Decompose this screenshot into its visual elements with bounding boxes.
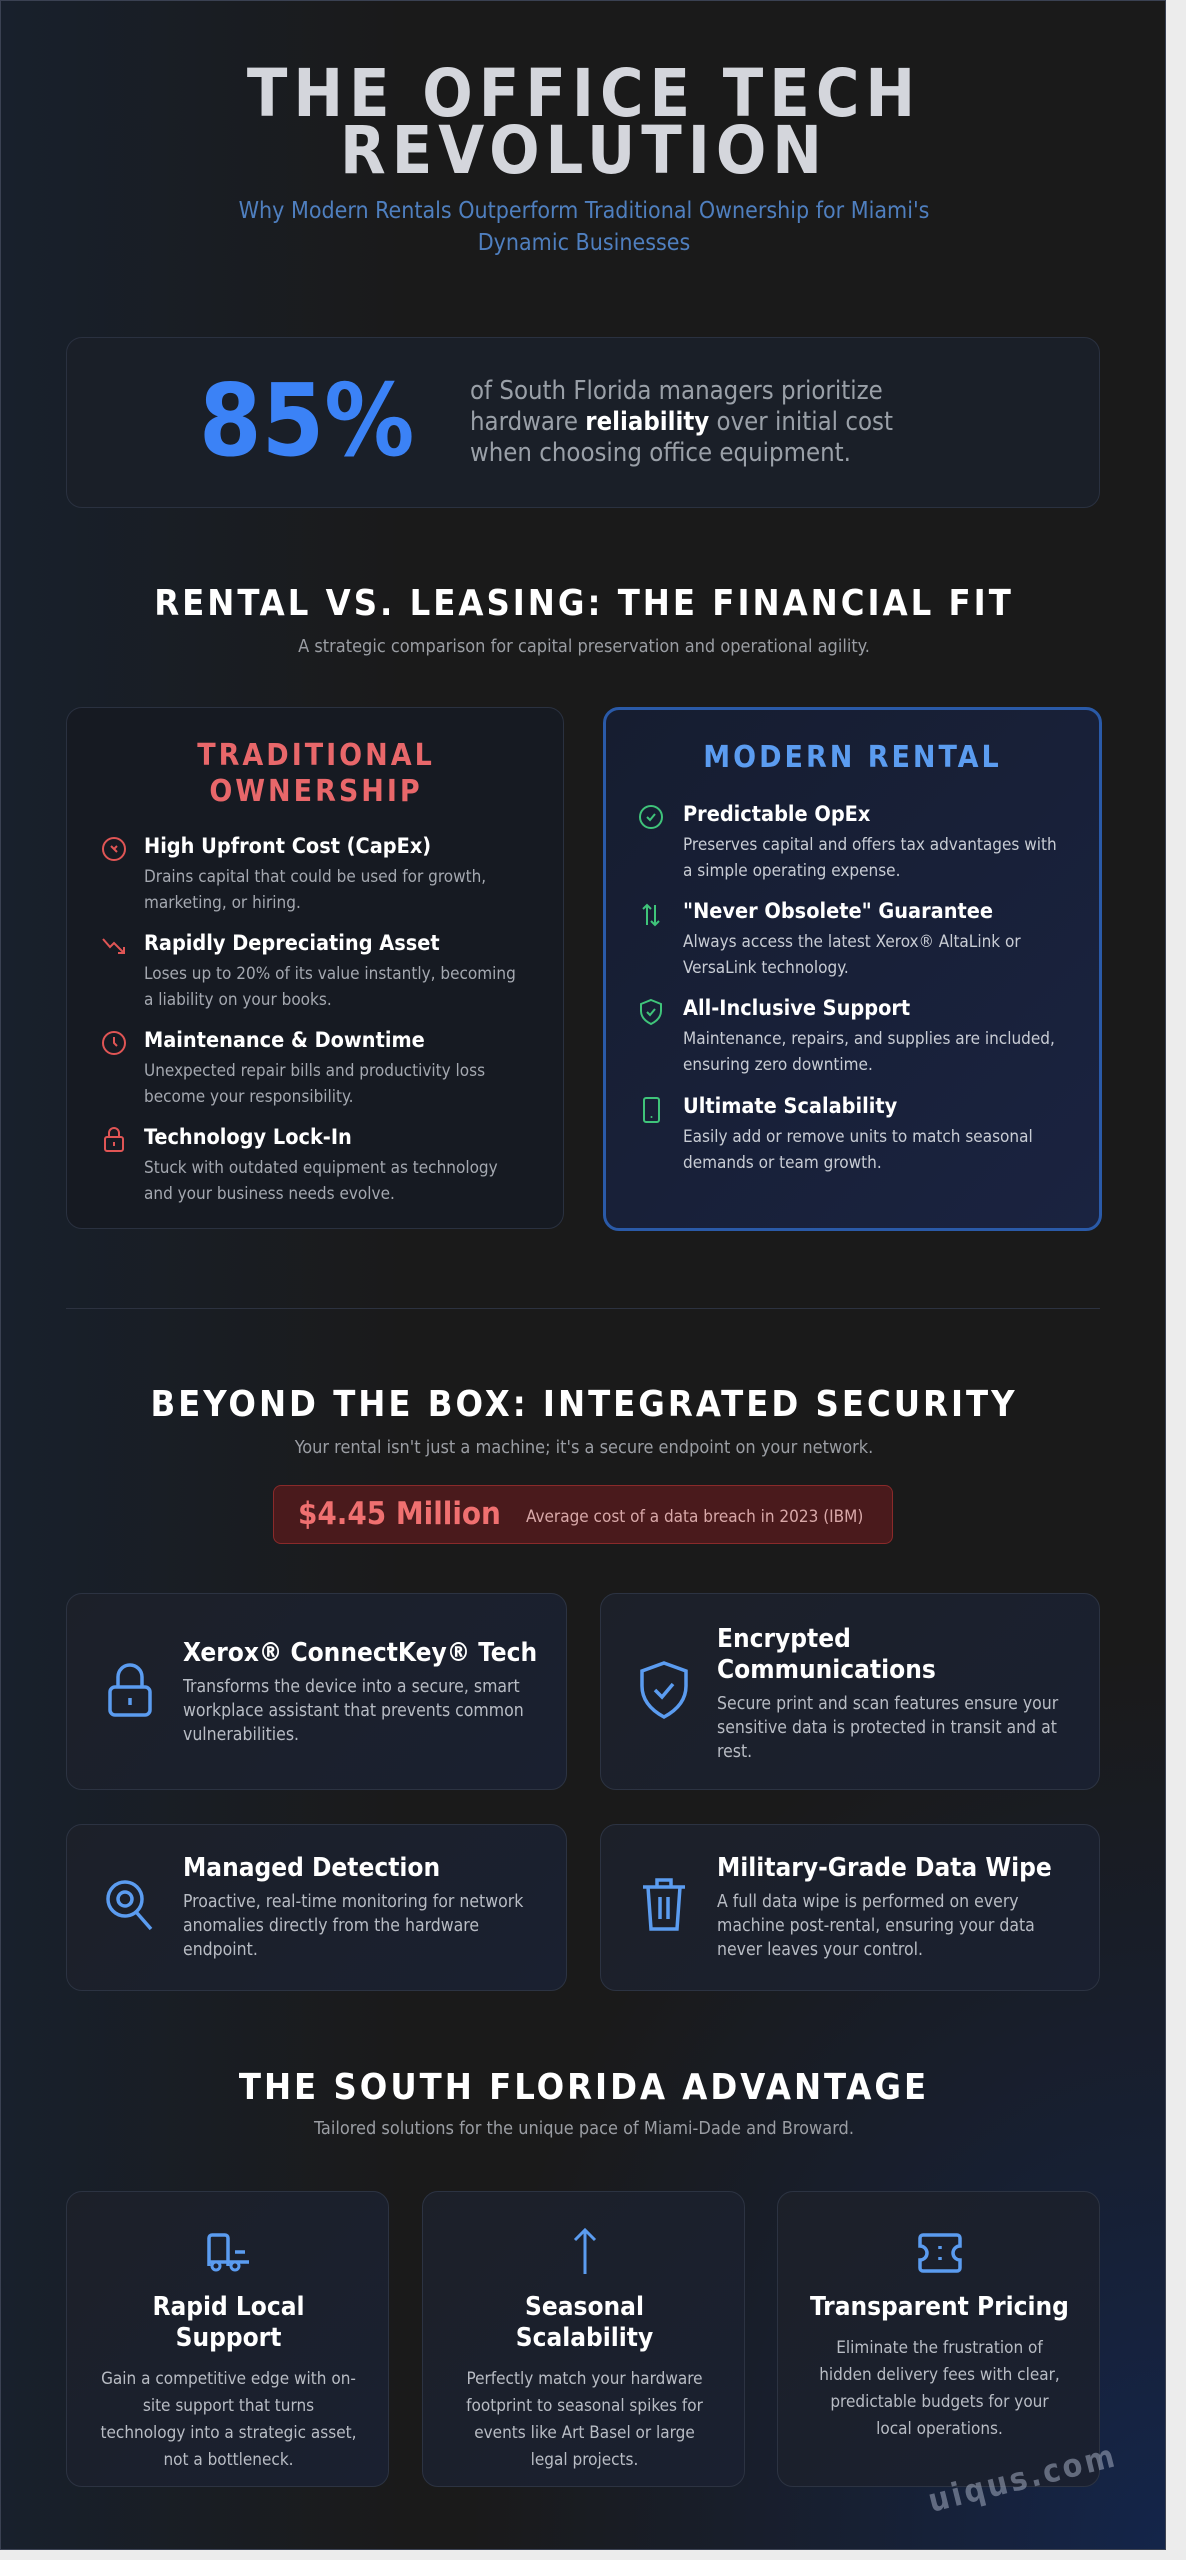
item: upfront cost [102, 834, 486, 913]
stat text: of South Florida managers prioritize hardware reliability over initial cost when choosing office equipment. [470, 376, 893, 468]
item: depreciating: Rapidly Depreciating Asset [144, 931, 440, 956]
card: data wipe: Military-Grade Data Wipe [717, 1853, 1052, 1883]
card: transparent pricing: Transparent Pricing [810, 2292, 1069, 2322]
card: data wipe [600, 1824, 1100, 1991]
icon: magnifier [106, 1880, 152, 1930]
callout: breach cost [273, 1485, 893, 1544]
card: seasonal scalability [422, 2191, 745, 2487]
card: connectkey [66, 1593, 567, 1790]
panel: modern rental [603, 707, 1102, 1231]
card: encrypted: Communications [717, 1655, 936, 1685]
item: upfront cost: Drains capital that could be used for growth, marketing, or hiring. [144, 867, 486, 913]
heading: security: BEYOND THE BOX: INTEGRATED SECURITY [150, 1384, 1018, 1425]
icon: truck [207, 2233, 249, 2272]
title [247, 55, 921, 189]
heading: rental vs leasing: RENTAL VS. LEASING: THE FINANCIAL FIT [154, 583, 1014, 624]
stat number: 85% [199, 362, 414, 479]
callout: breach cost: Average cost of a data breach in 2023 (IBM) [526, 1507, 863, 1527]
watermark: uiqus.com [924, 2436, 1121, 2520]
card: encrypted [600, 1593, 1100, 1790]
subheading: Tailored solutions for the unique pace of Miami-Dade and Broward. [314, 2118, 854, 2139]
panel: traditional ownership [66, 707, 564, 1229]
item: depreciating: Loses up to 20% of its value instantly, becoming a liability on your books. [144, 964, 516, 1010]
icon: ticket [918, 2233, 962, 2273]
card: seasonal scalability: Seasonal [525, 2292, 644, 2322]
card: encrypted: Secure print and scan features ensure your sensitive data is protected in transit and at rest. [717, 1694, 1058, 1762]
card: detection: Managed Detection [183, 1853, 440, 1883]
card: rapid local support: Gain a competitive edge with on-site support that turns technology into a strategic asset, not a bottleneck. [100, 2369, 356, 2470]
item: never obsolete: "Never Obsolete" Guarantee [683, 899, 993, 924]
card: rapid local support [66, 2191, 389, 2487]
item: opex [639, 802, 1057, 881]
stat panel [66, 337, 1100, 508]
card: detection [66, 1824, 567, 1991]
card: rapid local support: Rapid Local [152, 2292, 305, 2322]
subheading: Your rental isn't just a machine; it's a secure endpoint on your network. [295, 1437, 873, 1458]
item: lock-in: Stuck with outdated equipment as technology and your business needs evolve. [144, 1158, 498, 1204]
card: transparent pricing: Eliminate the frustration of hidden delivery fees with clear, predictable budgets for your local operations. [819, 2338, 1060, 2439]
item: support: Maintenance, repairs, and supplies are included, ensuring zero downtime. [683, 1029, 1055, 1075]
item: depreciating [102, 931, 516, 1010]
title: REVOLUTION [340, 112, 828, 189]
item: maintenance: Maintenance & Downtime [144, 1028, 425, 1053]
item: upfront cost: High Upfront Cost (CapEx) [144, 834, 431, 859]
panel heading: MODERN RENTAL [703, 740, 1002, 775]
item: support: All-Inclusive Support [683, 996, 910, 1021]
item: lock-in: Technology Lock-In [144, 1125, 352, 1150]
item: maintenance: Unexpected repair bills and productivity loss become your responsibility. [144, 1061, 485, 1107]
item: never obsolete [642, 899, 1021, 978]
item: lock-in [104, 1125, 498, 1204]
item: opex: Predictable OpEx [683, 802, 870, 827]
title: THE OFFICE TECH [247, 55, 921, 132]
item: support [640, 996, 1055, 1075]
callout: breach cost: $4.45 Million [298, 1496, 501, 1532]
card: seasonal scalability: Scalability [516, 2323, 653, 2353]
item: scalability [643, 1094, 1033, 1173]
card: transparent pricing [777, 2191, 1100, 2487]
card: connectkey: Transforms the device into a secure, smart workplace assistant that prevents common vulnerabilities. [183, 1677, 524, 1745]
card: connectkey: Xerox® ConnectKey® Tech [183, 1638, 537, 1668]
subheading: A strategic comparison for capital preservation and operational agility. [298, 636, 870, 657]
item: opex: Preserves capital and offers tax advantages with a simple operating expense. [683, 835, 1057, 881]
icon: arrow up [574, 2228, 596, 2274]
card: data wipe: A full data wipe is performed on every machine post-rental, ensuring your data never leaves your control. [717, 1892, 1035, 1960]
panel heading: OWNERSHIP [209, 774, 423, 809]
card: encrypted: Encrypted [717, 1624, 851, 1654]
icon: trash [643, 1878, 685, 1931]
item: never obsolete: Always access the latest Xerox® AltaLink or VersaLink technology. [683, 932, 1021, 978]
item: maintenance [102, 1028, 485, 1107]
icon: lock [108, 1663, 152, 1717]
panel heading [197, 738, 435, 809]
card: rapid local support: Support [176, 2323, 281, 2353]
card: seasonal scalability: Perfectly match your hardware footprint to seasonal spikes for events like Art Basel or large legal projects. [466, 2369, 703, 2470]
subtitle: Why Modern Rentals Outperform Traditional Ownership for Miami's Dynamic Businesses [239, 198, 929, 256]
panel heading: TRADITIONAL [197, 738, 435, 773]
icon: shield [640, 1661, 688, 1719]
heading: south florida: THE SOUTH FLORIDA ADVANTAGE [239, 2067, 929, 2108]
card: detection: Proactive, real-time monitoring for network anomalies directly from the hardware endpoint. [183, 1892, 523, 1960]
item: scalability: Easily add or remove units to match seasonal demands or team growth. [683, 1127, 1033, 1173]
item: scalability: Ultimate Scalability [683, 1094, 897, 1119]
